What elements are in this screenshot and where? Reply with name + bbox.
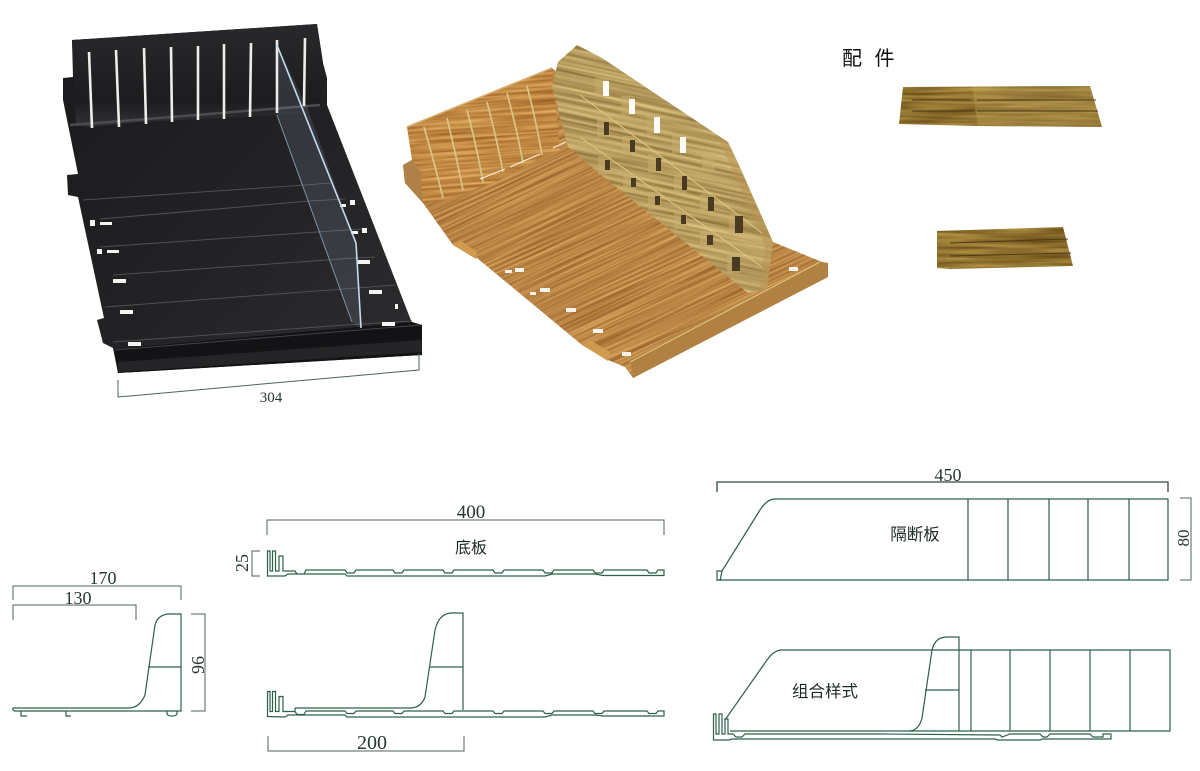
drawing: base board: [232, 502, 664, 576]
white floor slots: [90, 200, 398, 346]
photo: wood-grain tray with divider: [403, 45, 828, 378]
base profile: [268, 551, 664, 576]
dimension: 96: [188, 614, 208, 711]
floor tabs: [453, 240, 610, 361]
dimension: 200: [268, 732, 464, 754]
dimension: 200: 200: [357, 732, 387, 754]
wood floor: [403, 68, 828, 378]
divider ribs: [971, 650, 1130, 731]
tray floor and outline: [63, 24, 422, 373]
gold slats: [424, 86, 542, 198]
divider outline: [725, 650, 1170, 731]
front bar: [114, 322, 422, 373]
base profile: [714, 714, 1111, 740]
wood back wall: [407, 69, 560, 203]
side profile: [13, 614, 181, 711]
dimension: 130: 130: [64, 588, 92, 608]
wood end block: [403, 160, 423, 203]
divider front edge: [718, 136, 773, 292]
base profile: [268, 692, 664, 717]
drawing: divider panel: [717, 465, 1193, 581]
dimension: 170: 170: [90, 568, 116, 588]
accessory grooves: [912, 100, 1098, 111]
wall top edge highlight: [407, 68, 552, 127]
clear divider: [277, 45, 361, 328]
floor slots: [505, 267, 798, 356]
dimension: 80: 80: [1174, 530, 1193, 546]
drawing: base board with side piece: [268, 613, 664, 754]
dimension: 450: 450: [934, 465, 962, 485]
tray back wall: [72, 24, 323, 127]
photo: short accessory piece: [937, 227, 1073, 269]
panel outline: [717, 499, 1168, 581]
drawing: combined assembly: [714, 637, 1170, 740]
divider panel: [552, 45, 773, 293]
divider grooves: [580, 95, 762, 267]
dimension: 80: [1174, 498, 1193, 580]
label: divider panel: 隔断板: [890, 525, 940, 544]
divider windows, top row: [603, 81, 686, 153]
label: base board: 底板: [455, 539, 487, 557]
dimension: 304: 304: [260, 390, 283, 406]
label: combined style: 组合样式: [792, 682, 858, 701]
white wall slats: [89, 38, 305, 128]
dimension: 25: 25: [232, 554, 252, 572]
front rail: [630, 262, 828, 378]
dimension: 25: [232, 551, 260, 576]
dimension: 400: [267, 502, 664, 535]
divider window recesses: [595, 78, 742, 273]
feet: [21, 711, 177, 716]
tray transverse ribs: [83, 183, 412, 342]
heading: accessories: 配 件: [842, 47, 895, 70]
divider windows, lower rows: [604, 122, 743, 271]
side piece outline: [295, 613, 463, 711]
photo: long accessory piece: [899, 86, 1102, 127]
photo: black tray with clear divider: [63, 24, 422, 406]
dimension: 304: [118, 353, 419, 406]
dimension: 450: [717, 465, 1168, 492]
wall-to-floor highlight: [70, 105, 320, 125]
side piece outline: [910, 637, 959, 731]
dimension: 96: 96: [188, 656, 208, 674]
wall base highlight dashes: [480, 142, 566, 179]
dimension: 400: 400: [457, 502, 485, 523]
dimension: 130: [13, 588, 136, 620]
drawing: side view with 170, 130 and 96 dimensions: [13, 568, 208, 716]
dimension: 170: [13, 568, 181, 600]
panel ribs: [968, 499, 1129, 580]
